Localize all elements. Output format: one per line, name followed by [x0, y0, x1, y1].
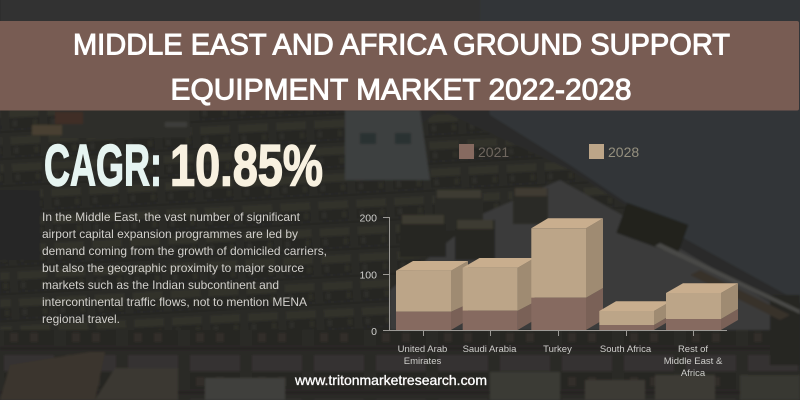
vehicle near the rail [616, 203, 688, 255]
website url: www.tritonmarketresearch.com [294, 372, 487, 388]
x axis labels [398, 344, 723, 379]
CAGR headline [44, 134, 323, 198]
description text block: but also the geographic proximity to major source [42, 262, 304, 275]
deck texture left [0, 110, 345, 350]
x axis labels: United Arab [398, 344, 447, 355]
bar: South Africa [599, 301, 671, 330]
y axis labels [359, 212, 377, 338]
chart legend [459, 144, 639, 160]
building [345, 110, 430, 180]
stacked 3D bar chart [359, 212, 738, 379]
x axis labels: Middle East & [664, 356, 723, 367]
x axis labels: Saudi Arabia [463, 344, 517, 355]
legend: 2028 [589, 144, 639, 160]
description text block: airport capital expansion programmes are led by [42, 228, 298, 241]
top dock strip [0, 0, 480, 25]
CAGR value: 10.85% [170, 134, 323, 198]
bar: United Arab Emirates [396, 261, 468, 330]
y axis labels: 200 [359, 212, 377, 224]
legend: 2021: 2021 [478, 144, 509, 160]
sea [470, 0, 800, 305]
open deck patch left [60, 110, 190, 138]
x axis [390, 330, 727, 336]
bar: Turkey [531, 218, 603, 330]
x axis labels: South Africa [600, 344, 652, 355]
description text block [42, 211, 327, 326]
title line 2: EQUIPMENT MARKET 2022-2028 [170, 74, 632, 106]
x axis labels: Emirates [404, 356, 441, 367]
CAGR label: CAGR: [44, 134, 162, 198]
bottom vehicles [0, 330, 800, 400]
y axis labels: 100 [359, 270, 377, 282]
bar: Saudi Arabia [463, 258, 534, 330]
x axis labels: Turkey [543, 344, 572, 355]
x axis labels: Rest of [678, 344, 708, 355]
bar: Rest of Middle East and Africa [666, 283, 738, 330]
title banner [0, 21, 799, 110]
description text block: markets such as the Indian subcontinent and [42, 279, 279, 292]
description text block: In the Middle East, the vast number of significant [42, 211, 301, 224]
open deck [390, 180, 800, 345]
legend: 2021 [459, 144, 509, 160]
legend: 2028: 2028 [608, 144, 639, 160]
description text block: intercontinental traffic flows, not to mention MENA [42, 296, 307, 309]
description text block: demand coming from the growth of domiciled carriers, [42, 245, 327, 258]
title line 1: MIDDLE EAST AND AFRICA GROUND SUPPORT [73, 28, 730, 62]
x axis labels: Africa [681, 368, 706, 379]
y axis [383, 217, 390, 330]
description text block: regional travel. [42, 313, 120, 326]
deck texture centre [345, 110, 640, 330]
y axis labels: 0 [371, 326, 377, 338]
